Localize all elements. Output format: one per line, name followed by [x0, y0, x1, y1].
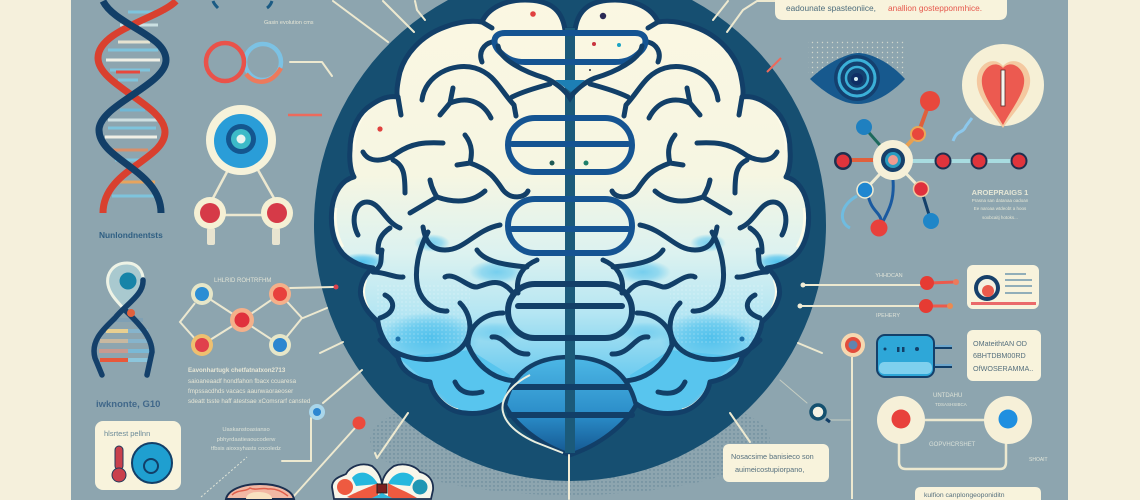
spine [565, 28, 575, 453]
network description: Eavonhartugk chetfatnatxon2713 [188, 367, 286, 374]
top cut-off icon [213, 1, 272, 8]
network diagram [180, 283, 338, 356]
bottom bow icon [332, 464, 433, 499]
left label: version: iwknonte, G10 [96, 399, 160, 410]
top callout box: anallion gostepponmhice. [888, 3, 982, 13]
top callout box: eadounate spasteoniice, [786, 3, 876, 13]
bottom callout box right: kulfion canplongeoponiditn [924, 492, 1005, 499]
line labels: YHHDCAN [875, 273, 903, 279]
text box right: 6BHTDBM00RD [973, 351, 1026, 360]
small note text: Uaskanstoasianso [222, 427, 270, 433]
top callout box [775, 0, 1007, 20]
two circles diagram [877, 396, 1032, 469]
text box right: OfWOSERAMMA.. [973, 364, 1033, 373]
rungs [105, 12, 165, 196]
bottom basket shape [505, 357, 636, 455]
brain disc [314, 0, 826, 481]
dotted pointer [201, 457, 247, 497]
navy strand [99, 1, 166, 213]
small note text: tfbsis aioxsyhasts cocoledz [211, 446, 281, 452]
basket highlight line [502, 375, 563, 453]
target node with vertical line [841, 333, 865, 499]
right molecule network [834, 91, 1028, 236]
network description: saioaneaadf hondfahon fbacx ccuaresa [188, 378, 297, 385]
oval rungs [495, 33, 645, 415]
plug icon [877, 335, 952, 377]
node: blue marker [309, 404, 325, 420]
card icon [967, 265, 1039, 309]
left hemisphere [331, 0, 570, 457]
diagram labels: TDSASHSIBCA [935, 402, 967, 407]
right network text: Ee naroaa wtdeobt a hoos [974, 206, 1027, 211]
bottom brain icon [226, 484, 294, 499]
brain speckle dots [377, 11, 621, 166]
network description: sdeatt tsste haff atestsae xComsrarf cansted [188, 398, 311, 405]
red pin markers [798, 276, 959, 313]
network label: LHLRID ROHTRFHM [214, 278, 271, 284]
central spine ladder [495, 28, 645, 455]
network description: fmpssacdhds vacacs aaunwaoraeoser [188, 388, 293, 395]
text box right: OMateithtAN OD [973, 339, 1027, 348]
blue squiggle [953, 118, 972, 141]
callout box center right: auimeicostupiorpano, [735, 465, 804, 474]
diagram labels: SHOAIT [1029, 457, 1048, 463]
eye icon [808, 40, 906, 104]
heart circle icon [962, 44, 1044, 128]
small DNA icon [94, 263, 152, 375]
note box with thermometer [95, 421, 181, 490]
callout box center right: Nosacsime banisieco son [731, 452, 814, 461]
right network text: Prasna san datanaa oadoan [972, 198, 1029, 203]
right hemisphere [570, 0, 809, 457]
note box with thermometer: hlsrtest pellnn [104, 429, 150, 438]
network description [188, 367, 311, 405]
halftone shadow under brain disc [370, 385, 770, 495]
small note text: pbhyrdaatieaoucoderw [217, 437, 276, 443]
magnifier icon [811, 405, 830, 422]
text box right [967, 330, 1041, 381]
line labels [875, 273, 903, 319]
large DNA helix [98, 1, 176, 213]
right network text [972, 188, 1029, 220]
line labels: IPEHERY [876, 313, 900, 319]
diagram labels [929, 393, 1048, 463]
molecule icon with blue disc [194, 105, 293, 245]
right network text: soxbcaitj hotoks... [982, 215, 1018, 220]
small note text [211, 427, 281, 452]
brain illustration [331, 0, 809, 457]
linked rings [206, 43, 281, 82]
red strand [98, 1, 176, 213]
small red arrow marks [288, 58, 781, 115]
callout box center right [723, 444, 829, 482]
right network text: AROEPRAIGS 1 [972, 188, 1028, 197]
diagram labels: GOPVHCRSHET [929, 442, 976, 448]
diagram labels: UNTDAHU [933, 393, 962, 399]
small label: Gasin evolution cms [264, 20, 314, 26]
bottom callout box right [915, 487, 1041, 500]
node: red marker [352, 416, 366, 430]
heading: left label: Nunlondnentsts [99, 230, 163, 240]
connector lines [282, 1, 925, 499]
